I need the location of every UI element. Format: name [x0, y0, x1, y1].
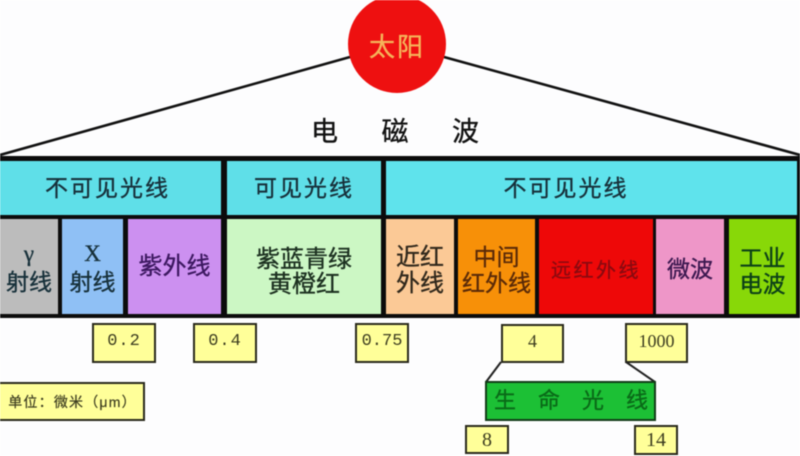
band: visible light [227, 161, 381, 215]
value 8 [465, 425, 509, 454]
cell: ultraviolet: 紫外线 [138, 253, 210, 280]
cell: near infrared [386, 219, 454, 314]
spectrum table frame [0, 156, 800, 318]
cell: gamma rays: γ 射线 [6, 240, 52, 294]
cell: industrial waves: 工业 电波 [740, 245, 786, 297]
heading: electromagnetic wave: 电 [311, 117, 338, 147]
band: invisible light left: 不可见光线 [45, 175, 170, 201]
unit label [0, 382, 145, 421]
value 0.4 [193, 323, 257, 363]
cell: ultraviolet [128, 219, 221, 314]
pyramid lines from sun to spectrum [0, 55, 800, 157]
cell: industrial waves [729, 219, 796, 314]
life rays box: 生 [494, 388, 516, 413]
value 0.75: 0.75 [362, 332, 402, 350]
cell: X rays [62, 219, 123, 314]
value 4 [501, 324, 564, 363]
cell: visible colors: 紫蓝青绿 黄橙红 [256, 246, 352, 298]
cell: visible colors [227, 219, 381, 314]
cell: mid infrared: 中间 红外线 [462, 244, 531, 296]
cell: microwave: 微波 [667, 256, 713, 282]
band: visible light: 可见光线 [254, 175, 354, 201]
life rays box [485, 381, 656, 421]
cell: microwave [656, 219, 724, 314]
value 14 [634, 425, 678, 455]
value 1000 [625, 323, 688, 363]
heading: electromagnetic wave: 波 [452, 117, 479, 147]
cell: far infrared: 远红外线 [551, 260, 641, 282]
life rays box: 线 [626, 388, 648, 413]
sun circle: 太阳 [369, 32, 425, 62]
value 0.2 [92, 323, 156, 363]
band: invisible light left [0, 161, 221, 215]
cell: mid infrared [458, 219, 535, 314]
cell: near infrared: 近红 外线 [396, 244, 444, 297]
value 14: 14 [646, 429, 666, 451]
value 0.2: 0.2 [107, 332, 141, 350]
cell: gamma rays [0, 219, 58, 314]
value 4: 4 [528, 331, 537, 351]
value 1000: 1000 [638, 330, 674, 350]
life rays box: 命 [538, 388, 560, 413]
cell: X rays: X 射线 [70, 240, 116, 294]
cell: far infrared [539, 219, 653, 314]
band: invisible light right: 不可见光线 [504, 175, 628, 201]
value 8: 8 [482, 428, 492, 450]
life rays box: 光 [582, 388, 604, 413]
value 0.75 [355, 323, 409, 363]
heading: electromagnetic wave: 磁 [382, 117, 408, 147]
unit label: 单位：微米（μm） [8, 394, 137, 410]
band: invisible light right [386, 161, 797, 215]
connector lines to life rays [485, 360, 656, 382]
value 0.4: 0.4 [208, 332, 242, 350]
sun circle [348, 0, 446, 93]
heading: electromagnetic wave [311, 116, 479, 147]
